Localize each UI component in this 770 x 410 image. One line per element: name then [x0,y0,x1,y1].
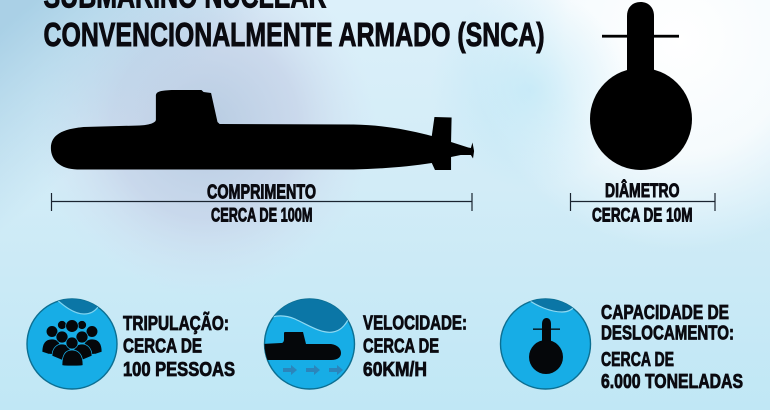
crew text: TRIPULAÇÃO: [123,312,229,335]
length value: CERCA DE 100M [211,206,312,226]
submarine side silhouette [51,90,474,170]
length dimension [52,182,472,226]
title [44,0,544,53]
speed text: 60KM/H [363,359,427,381]
diameter dimension [570,178,715,226]
displacement text: CERCA DE [601,349,674,371]
submarine front silhouette [590,2,692,170]
crew text: CERCA DE [123,336,202,358]
diameter value: CERCA DE 10M [592,206,692,226]
diameter label: DIÂMETRO [605,178,680,202]
title: CONVENCIONALMENTE ARMADO (SNCA) [44,16,544,53]
speed text [363,312,467,381]
crew text [123,312,235,381]
crew text: 100 PESSOAS [123,359,235,381]
length dimension line [52,193,472,211]
icon: speed [262,296,354,389]
icon: displacement [500,292,590,389]
speed text: VELOCIDADE: [363,312,467,334]
displacement text: CAPACIDADE DE [601,302,729,324]
diameter dimension line [570,193,715,211]
displacement text [601,302,743,393]
icon: crew [27,290,117,389]
speed text: CERCA DE [363,336,439,358]
length label: COMPRIMENTO [207,182,316,204]
